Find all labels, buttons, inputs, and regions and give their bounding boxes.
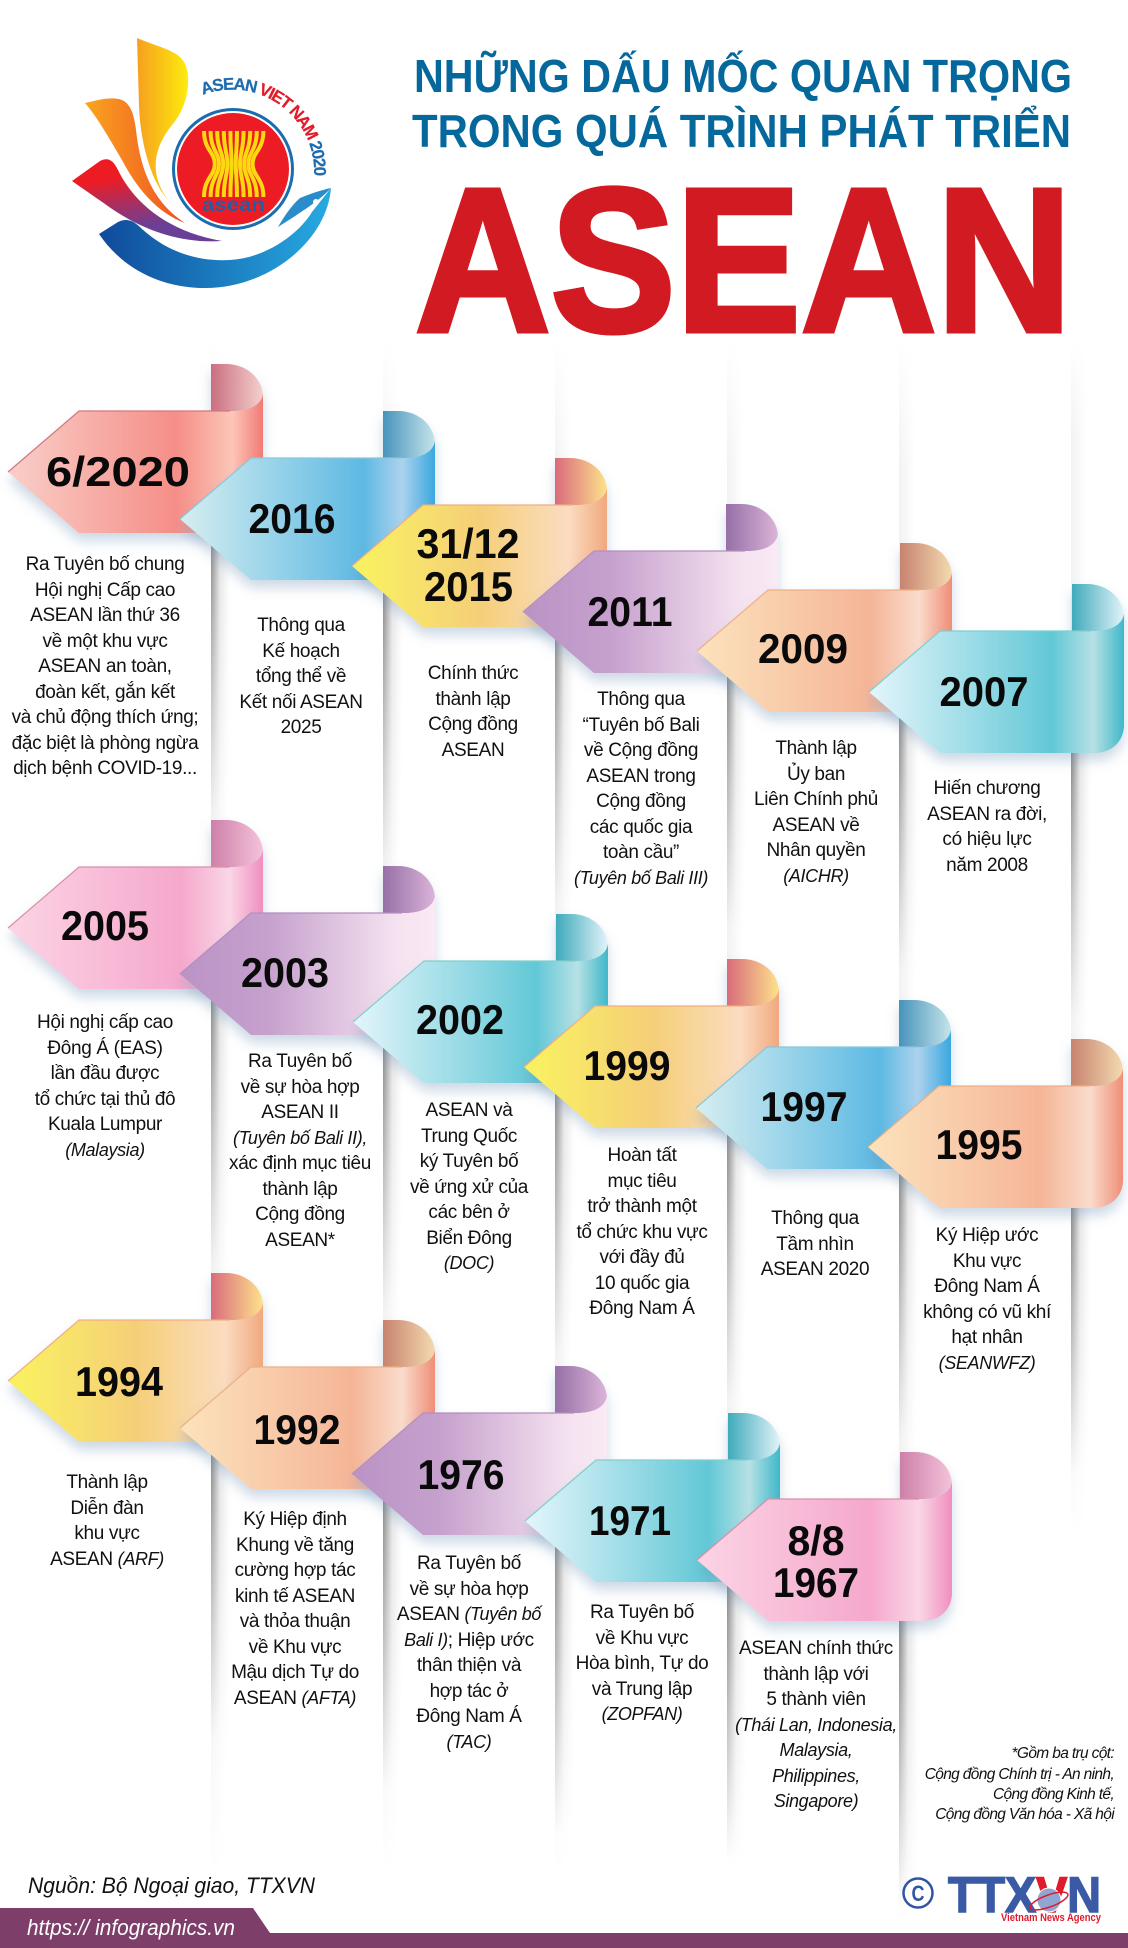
text: 1992: Khung về tăng bbox=[236, 1534, 354, 1556]
text: 2002: ký Tuyên bố bbox=[420, 1151, 518, 1172]
text: 1976: Ra Tuyên bố bbox=[417, 1553, 521, 1574]
logo: ASEAN Viet Nam 2020 bbox=[72, 38, 331, 288]
ribbon: 2007 bbox=[869, 584, 1124, 753]
text: 1999: 10 quốc gia bbox=[595, 1272, 689, 1294]
ribbon: 2005 bbox=[8, 820, 263, 989]
text: 1971: và Trung lập bbox=[592, 1678, 692, 1700]
text: 1992: ASEAN (AFTA) bbox=[234, 1688, 356, 1708]
text: 2011: “Tuyên bố Bali bbox=[583, 714, 699, 736]
footer bar bbox=[0, 1908, 1128, 1948]
text: 1995: Khu vực bbox=[953, 1250, 1021, 1272]
ribbon: 1994: 1994 bbox=[75, 1358, 164, 1405]
text: 2011: Thông qua bbox=[597, 689, 685, 710]
text: 1997: Thông qua bbox=[771, 1208, 859, 1229]
text: 2005: Đông Á (EAS) bbox=[47, 1038, 163, 1058]
ribbon: 8/8/1967: 1967 bbox=[773, 1559, 859, 1606]
ribbon: 1995 bbox=[868, 1039, 1123, 1208]
text: 8/8/1967: ASEAN chính thức bbox=[739, 1638, 893, 1659]
text: 2007: Hiến chương bbox=[934, 778, 1040, 799]
text: 2016: Thông qua bbox=[257, 615, 345, 636]
ribbon: 2002 bbox=[353, 914, 608, 1083]
text: 1971: về Khu vực bbox=[596, 1628, 688, 1648]
ribbon: 2016: 2016 bbox=[248, 495, 336, 542]
text: 1992: về Khu vực bbox=[249, 1636, 341, 1658]
ribbon: 1992: 1992 bbox=[254, 1406, 340, 1453]
text: 8/8/1967: Singapore) bbox=[774, 1791, 858, 1811]
footnote: Cộng đồng Kinh tế, bbox=[993, 1786, 1114, 1803]
text: 8/8/1967: 5 thành viên bbox=[766, 1689, 866, 1710]
title bbox=[412, 50, 1072, 375]
text: 2016: tổng thể về bbox=[256, 666, 346, 687]
logo: orange petal bbox=[85, 98, 185, 223]
text: 6/2020 bbox=[12, 554, 199, 779]
title line 2: TRONG QUÁ TRÌNH PHÁT TRIỂN bbox=[412, 105, 1071, 157]
text: 2011: toàn cầu” bbox=[603, 842, 679, 863]
ribbon: 1995: 1995 bbox=[936, 1121, 1022, 1168]
text: 1971: (ZOPFAN) bbox=[602, 1704, 682, 1724]
ribbon: 2007: 2007 bbox=[940, 668, 1028, 715]
ribbon: 1994 bbox=[8, 1273, 263, 1442]
text: 2009: Liên Chính phủ bbox=[754, 789, 878, 810]
text: 8/8/1967 bbox=[735, 1638, 897, 1811]
text: 1976 bbox=[397, 1553, 543, 1752]
logo: yellow petal bbox=[137, 38, 188, 200]
text: 2005: Hội nghị cấp cao bbox=[37, 1012, 173, 1033]
text: 1999: mục tiêu bbox=[607, 1170, 677, 1192]
text: 2007: năm 2008 bbox=[946, 854, 1028, 876]
text: 2003: ASEAN* bbox=[265, 1230, 335, 1250]
text: 2005 bbox=[35, 1012, 175, 1160]
text: 1992: Mậu dịch Tự do bbox=[231, 1662, 359, 1683]
footnote bbox=[925, 1745, 1115, 1823]
text: 6/2020: về một khu vực bbox=[42, 630, 168, 652]
text: 2003 bbox=[229, 1051, 371, 1250]
ribbon: 31/12/2015 bbox=[352, 458, 607, 627]
TTXVN logo: Vietnam News Agency bbox=[1001, 1912, 1102, 1924]
text: 31/12/2015: ASEAN bbox=[442, 740, 504, 760]
ribbon: 2011: 2011 bbox=[588, 588, 672, 635]
text: 1999: tổ chức khu vực bbox=[576, 1222, 708, 1242]
ribbon: 31/12/2015: 2015 bbox=[424, 563, 513, 610]
text: 2002: các bên ở bbox=[428, 1202, 510, 1223]
text: 2011: về Cộng đồng bbox=[584, 740, 698, 761]
text: 2011: (Tuyên bố Bali III) bbox=[574, 868, 708, 888]
text: 2005: (Malaysia) bbox=[65, 1140, 145, 1160]
text: 2011 bbox=[574, 689, 708, 888]
footnote: Cộng đồng Văn hóa - Xã hội bbox=[935, 1806, 1115, 1823]
text: 31/12/2015: thành lập bbox=[435, 688, 511, 710]
ribbon: 8/8/1967 bbox=[697, 1452, 952, 1621]
ribbon: 2003: 2003 bbox=[241, 949, 329, 996]
text: 1997 bbox=[760, 1208, 869, 1280]
logo: red purple petal bbox=[72, 159, 222, 241]
text: 2016: Kết nối ASEAN bbox=[239, 692, 363, 712]
text: 6/2020: ASEAN an toàn, bbox=[38, 656, 172, 677]
text: 2002: ASEAN và bbox=[426, 1100, 512, 1121]
text: 1992: và thỏa thuận bbox=[240, 1611, 350, 1632]
logo: arrow flap bbox=[278, 188, 331, 227]
footnote: Cộng đồng Chính trị - An ninh, bbox=[925, 1766, 1114, 1783]
text: 2005: lần đầu được bbox=[51, 1063, 159, 1084]
ribbon: 8/8/1967: 8/8 bbox=[788, 1517, 844, 1564]
text: 8/8/1967: thành lập với bbox=[763, 1664, 869, 1684]
text: 2016: Kế hoạch bbox=[262, 640, 340, 662]
ribbon: 1999 bbox=[524, 959, 779, 1128]
text: 2003: ASEAN II bbox=[261, 1102, 339, 1123]
text: 2009: (AICHR) bbox=[783, 866, 849, 886]
text: 1994: khu vực bbox=[74, 1523, 140, 1544]
ribbon: 1992 bbox=[180, 1320, 435, 1489]
text: 8/8/1967: (Thái Lan, Indonesia, bbox=[735, 1714, 897, 1734]
text: 1994: Diễn đàn bbox=[70, 1498, 144, 1518]
text: 1992: cường hợp tác bbox=[235, 1560, 355, 1581]
text: 31/12/2015 bbox=[428, 663, 518, 760]
text: 1992 bbox=[231, 1509, 359, 1708]
text: 1994: Thành lập bbox=[66, 1472, 148, 1493]
logo: blue swoosh bbox=[99, 188, 331, 288]
text: 2003: (Tuyên bố Bali II), bbox=[233, 1128, 367, 1148]
text: 2009: Ủy ban bbox=[787, 764, 845, 784]
source: Nguồn: Bộ Ngoại giao, TTXVN bbox=[28, 1873, 315, 1898]
title: ASEAN: ASEAN bbox=[415, 146, 1072, 375]
text: 1976: Bali I); Hiệp ước bbox=[404, 1630, 534, 1650]
text: 1997: ASEAN 2020 bbox=[761, 1259, 869, 1280]
ribbon: 6/2020: 6/2020 bbox=[46, 448, 190, 495]
ribbon: 2016 bbox=[180, 411, 435, 580]
text: 6/2020: Hội nghị Cấp cao bbox=[35, 580, 175, 600]
text: 2011: ASEAN trong bbox=[586, 766, 696, 786]
text: 1995: (SEANWFZ) bbox=[939, 1352, 1035, 1372]
text: 8/8/1967: Malaysia, bbox=[780, 1740, 852, 1760]
text: 1976: ASEAN (Tuyên bố bbox=[397, 1604, 541, 1625]
ribbon: 2011 bbox=[523, 504, 778, 673]
text: 1995: không có vũ khí bbox=[923, 1302, 1051, 1322]
text: 6/2020: dịch bệnh COVID-19... bbox=[13, 758, 197, 779]
ribbon: 1971: 1971 bbox=[589, 1497, 671, 1544]
ribbon: 2009: 2009 bbox=[758, 625, 848, 672]
text: 2007 bbox=[927, 778, 1047, 876]
text: 1995: Đông Nam Á bbox=[934, 1276, 1040, 1297]
ribbon: 1997 bbox=[696, 1000, 951, 1169]
text: 1995: hạt nhân bbox=[951, 1327, 1023, 1348]
text: 1995: Ký Hiệp ước bbox=[936, 1225, 1038, 1246]
ribbon: 31/12/2015: 31/12 bbox=[416, 520, 520, 567]
text: 2007: ASEAN ra đời, bbox=[927, 804, 1047, 824]
text: 2003: về sự hòa hợp bbox=[241, 1076, 359, 1098]
text: 1995 bbox=[923, 1225, 1052, 1373]
text: 2003: Ra Tuyên bố bbox=[248, 1051, 352, 1072]
ribbon: 1976 bbox=[352, 1366, 607, 1535]
text: 1971: Hòa bình, Tự do bbox=[576, 1653, 708, 1674]
text: 1976: hợp tác ở bbox=[430, 1680, 508, 1702]
text: 1999 bbox=[576, 1145, 708, 1319]
text: 2002: Biển Đông bbox=[426, 1228, 512, 1248]
text: 6/2020: và chủ động thích ứng; bbox=[12, 707, 198, 728]
text: 1976: Đông Nam Á bbox=[416, 1706, 522, 1727]
text: 31/12/2015: Chính thức bbox=[428, 663, 518, 684]
text: 2009: ASEAN về bbox=[773, 814, 859, 836]
TTXVN logo: TTXVN bbox=[948, 1867, 1101, 1923]
text: 2007: có hiệu lực bbox=[942, 829, 1032, 850]
text: 1999: trở thành một bbox=[587, 1196, 697, 1217]
logo: red emblem circle: asean bbox=[202, 195, 265, 216]
ribbon: 2002: 2002 bbox=[416, 996, 504, 1043]
ribbon: 2003 bbox=[180, 866, 435, 1035]
text: 2002: (DOC) bbox=[444, 1253, 494, 1273]
text: 2011: các quốc gia bbox=[590, 816, 692, 838]
text: 2009: Nhân quyền bbox=[767, 840, 865, 861]
text: 6/2020: ASEAN lần thứ 36 bbox=[30, 605, 180, 626]
ribbon: 1971 bbox=[525, 1413, 780, 1582]
text: 2003: Cộng đồng bbox=[255, 1204, 345, 1225]
text: 2009: Thành lập bbox=[775, 738, 857, 759]
text: 2002 bbox=[410, 1100, 528, 1273]
website url: https:// infographics.vn bbox=[27, 1915, 235, 1940]
text: 31/12/2015: Cộng đồng bbox=[428, 714, 518, 735]
ribbon: 1976: 1976 bbox=[418, 1451, 504, 1498]
text: 1971: Ra Tuyên bố bbox=[590, 1602, 694, 1623]
text: 1997: Tầm nhìn bbox=[776, 1234, 854, 1254]
text: 1994 bbox=[50, 1472, 164, 1570]
footnote: *Gồm ba trụ cột: bbox=[1012, 1745, 1114, 1762]
text: 2009 bbox=[754, 738, 878, 886]
title line 1: NHỮNG DẤU MỐC QUAN TRỌNG bbox=[414, 50, 1072, 102]
text: 2016 bbox=[239, 615, 363, 738]
text: 1976: (TAC) bbox=[447, 1732, 491, 1752]
text: 1999: Đông Nam Á bbox=[589, 1298, 695, 1319]
text: 6/2020: Ra Tuyên bố chung bbox=[26, 554, 184, 575]
ribbon: 1997: 1997 bbox=[760, 1083, 848, 1130]
text: 1994: ASEAN (ARF) bbox=[50, 1548, 164, 1570]
copyright icon: C bbox=[912, 1881, 925, 1906]
text: 6/2020: đặc biệt là phòng ngừa bbox=[12, 732, 198, 754]
text: 6/2020: đoàn kết, gắn kết bbox=[35, 682, 175, 702]
text: 2002: Trung Quốc bbox=[421, 1126, 517, 1146]
text: 2003: xác định mục tiêu bbox=[229, 1153, 371, 1174]
text: 2005: tổ chức tại thủ đô bbox=[35, 1088, 175, 1110]
logo: curved caption: ASEAN VIET NAM 2020 bbox=[203, 78, 326, 176]
text: 1992: kinh tế ASEAN bbox=[235, 1586, 355, 1606]
ribbon: 2005: 2005 bbox=[61, 902, 149, 949]
text: 2016: 2025 bbox=[281, 717, 321, 738]
logo: red emblem circle bbox=[174, 110, 292, 228]
text: 2002: về ứng xử của bbox=[410, 1176, 528, 1198]
ribbon: 1999: 1999 bbox=[584, 1042, 670, 1089]
text: 8/8/1967: Philippines, bbox=[772, 1766, 860, 1786]
text: 1999: Hoàn tất bbox=[607, 1145, 677, 1166]
text: 1971 bbox=[576, 1602, 708, 1724]
ribbon: 6/2020 bbox=[8, 364, 263, 533]
text: 1999: với đầy đủ bbox=[599, 1247, 685, 1268]
text: 2011: Cộng đồng bbox=[596, 791, 686, 812]
text: 2005: Kuala Lumpur bbox=[48, 1114, 162, 1135]
copyright icon bbox=[904, 1878, 932, 1908]
text: 1992: Ký Hiệp định bbox=[243, 1509, 347, 1530]
ribbon: 2009 bbox=[697, 543, 952, 712]
text: 2003: thành lập bbox=[262, 1178, 338, 1200]
text: 1976: thân thiện và bbox=[417, 1655, 521, 1676]
text: 1976: về sự hòa hợp bbox=[410, 1578, 528, 1600]
